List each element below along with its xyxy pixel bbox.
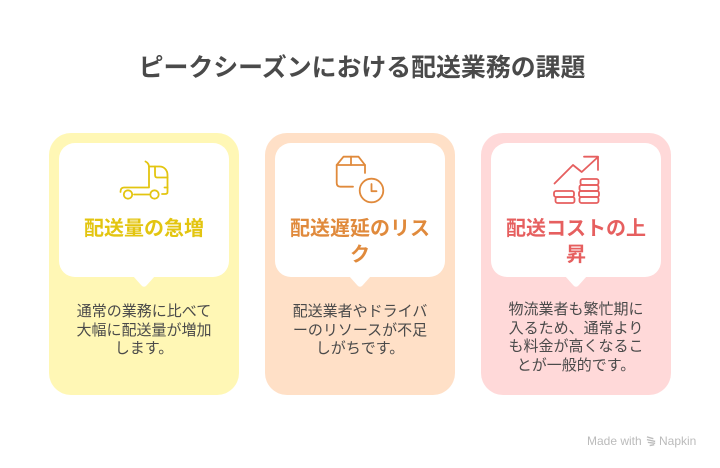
description bbox=[293, 303, 427, 357]
card header bbox=[491, 143, 661, 277]
description: 通常の業務に比べて bbox=[77, 303, 211, 320]
icon: rising chart with coins bbox=[553, 156, 600, 204]
description: 物流業者も繁忙期に bbox=[508, 301, 644, 318]
heading: 配送遅延のリス bbox=[290, 218, 430, 240]
panel: surge in delivery volume bbox=[49, 133, 239, 395]
description: 大幅に配送量が増加 bbox=[76, 322, 212, 339]
card header bbox=[59, 143, 229, 277]
description: 入るため、通常より bbox=[509, 320, 643, 337]
description: ーのリソースが不足 bbox=[293, 322, 427, 339]
icon: napkin logo bbox=[646, 436, 656, 446]
icon: truck bbox=[120, 160, 168, 200]
pointer bbox=[134, 277, 154, 287]
pointer bbox=[350, 277, 370, 287]
card header bbox=[275, 143, 445, 277]
description: 配送業者やドライバ bbox=[293, 303, 427, 320]
heading bbox=[506, 218, 646, 266]
description: しがちです。 bbox=[316, 340, 404, 357]
description: とが一般的です。 bbox=[517, 357, 635, 374]
panel: rising costs bbox=[481, 133, 671, 395]
panel: delivery delay risk bbox=[265, 133, 455, 395]
heading: ク bbox=[350, 244, 370, 266]
watermark: Made with bbox=[587, 434, 642, 448]
watermark: Napkin bbox=[659, 434, 696, 448]
heading: 昇 bbox=[566, 244, 586, 266]
watermark bbox=[587, 434, 696, 448]
heading: 配送コストの上 bbox=[506, 218, 646, 240]
title: ピークシーズンにおける配送業務の課題 bbox=[139, 54, 585, 82]
heading bbox=[290, 218, 430, 266]
heading: 配送量の急増 bbox=[84, 218, 204, 240]
description: も料金が高くなるこ bbox=[508, 338, 644, 355]
description bbox=[76, 303, 212, 357]
description bbox=[508, 301, 644, 374]
pointer bbox=[566, 277, 586, 287]
icon: package with clock bbox=[336, 156, 384, 204]
description: します。 bbox=[115, 340, 173, 357]
